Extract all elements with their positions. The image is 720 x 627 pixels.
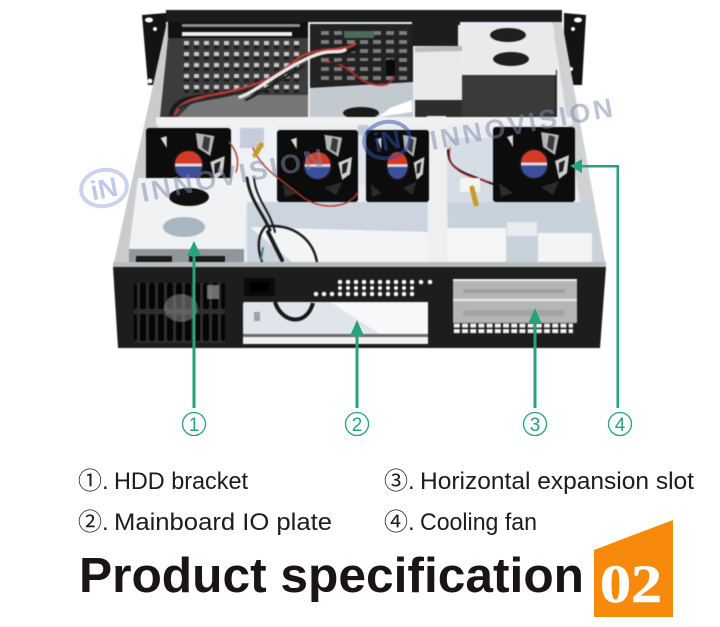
marker 1 <box>182 412 206 436</box>
fan power wires <box>229 142 493 206</box>
vertical divider bar <box>427 116 448 263</box>
callout arrow 1: HDD bracket <box>187 241 201 408</box>
watermark left logo <box>78 166 130 210</box>
legend <box>78 468 694 536</box>
marker 4 <box>608 412 632 436</box>
watermark right logo: iN <box>371 124 403 158</box>
marker 4: 4 <box>615 415 626 436</box>
legend item 3: Horizontal expansion slot <box>420 468 694 495</box>
wire harness <box>171 44 395 114</box>
cross bar above fans <box>156 117 572 125</box>
PSU fan vent <box>134 283 225 343</box>
mounting ear right <box>564 13 586 85</box>
marker 1: 1 <box>189 415 199 436</box>
rear left panel with perforation <box>160 22 308 117</box>
legend item 2: ②. <box>78 509 109 536</box>
power supply white bracket <box>415 25 556 100</box>
expansion slot <box>453 279 577 334</box>
watermark right wordmark: INNOVISION <box>428 93 615 156</box>
legend item 1: ①. <box>78 468 109 495</box>
fan 2 <box>277 130 358 202</box>
front panel <box>113 262 606 348</box>
mounting ear left <box>142 13 166 85</box>
power cables <box>247 178 317 262</box>
watermark right logo <box>361 118 413 162</box>
watermark right <box>361 93 615 162</box>
HDD bracket <box>129 178 246 265</box>
watermark left logo: iN <box>88 172 120 206</box>
marker 3: 3 <box>530 415 540 436</box>
marker 2: 2 <box>352 415 362 436</box>
callout arrow 3: Horizontal expansion slot <box>528 308 542 408</box>
rear centre panel <box>310 24 413 119</box>
chassis floor and frame <box>113 22 606 267</box>
title: Product specification <box>79 548 584 603</box>
legend item 2: Mainboard IO plate <box>114 509 332 536</box>
chassis photo <box>113 10 606 348</box>
mainboard IO cutout <box>243 302 428 344</box>
rear top bar <box>166 10 562 22</box>
section number badge: 02 <box>600 554 662 614</box>
callout arrow 4: Cooling fan <box>570 159 619 408</box>
legend item 1: HDD bracket <box>114 468 248 495</box>
fan 3 <box>366 130 429 202</box>
rear right dark bay <box>412 22 557 117</box>
fan 1 <box>146 128 231 203</box>
marker 3 <box>524 412 546 436</box>
marker 2 <box>346 412 368 436</box>
legend item 3: ③. <box>384 468 415 495</box>
section number badge <box>594 520 673 617</box>
watermark left <box>78 143 326 210</box>
fan bay floor <box>232 125 600 263</box>
legend item 4: Cooling fan <box>420 509 537 536</box>
callout arrow 2: Mainboard IO plate <box>350 320 364 408</box>
watermark left wordmark: INNOVISION <box>138 143 326 208</box>
power inlet <box>244 278 275 296</box>
ventilation dots <box>314 280 432 296</box>
legend item 4: ④. <box>384 509 415 536</box>
fan 4 <box>493 127 575 202</box>
